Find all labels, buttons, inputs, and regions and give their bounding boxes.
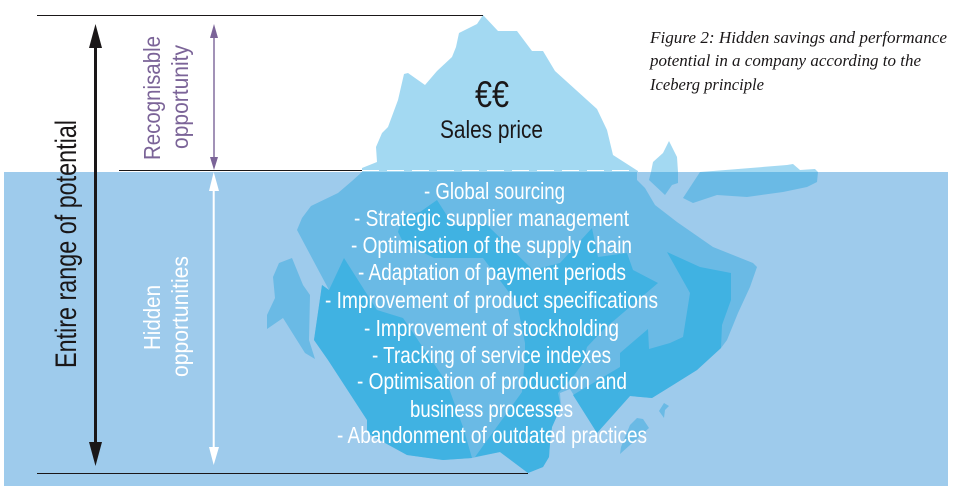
figure caption: potential in a company according to the xyxy=(649,51,921,70)
label: recognisable opportunity: opportunity xyxy=(167,45,193,149)
list: hidden savings: business processes xyxy=(410,396,573,422)
label: entire range of potential: Entire range of potential xyxy=(50,120,83,368)
list: hidden savings: - Optimisation of the supply chain xyxy=(351,232,632,258)
label: hidden opportunities: opportunities xyxy=(167,256,193,377)
list: hidden savings: - Global sourcing xyxy=(424,178,565,204)
label: recognisable opportunity: Recognisable xyxy=(139,36,165,160)
list: hidden savings xyxy=(325,178,658,448)
list: hidden savings: - Optimisation of production and xyxy=(357,368,627,394)
water panel xyxy=(4,172,948,486)
list: hidden savings: - Tracking of service indexes xyxy=(372,342,611,368)
heading: sales price xyxy=(440,74,543,144)
list: hidden savings: - Abandonment of outdated practices xyxy=(337,422,647,448)
label: hidden opportunities: Hidden xyxy=(139,285,165,350)
list: hidden savings: - Improvement of stockholding xyxy=(364,315,619,341)
arrow: entire range xyxy=(89,24,102,466)
iceberg above the water xyxy=(362,15,818,172)
figure caption: Iceberg principle xyxy=(649,75,764,94)
label: recognisable opportunity xyxy=(139,36,193,160)
level lines xyxy=(37,16,528,474)
iceberg below the water: outer layer xyxy=(267,172,818,473)
arrow: hidden opportunities xyxy=(209,172,219,465)
heading: sales price: €€ xyxy=(475,74,509,115)
iceberg below the water: dark core xyxy=(314,200,731,473)
waterline dashes xyxy=(362,170,636,172)
list: hidden savings: - Adaptation of payment periods xyxy=(358,259,626,285)
heading: sales price: Sales price xyxy=(440,116,543,144)
label: hidden opportunities xyxy=(139,256,193,377)
figure caption xyxy=(649,28,947,94)
figure caption: Figure 2: Hidden savings and performance xyxy=(649,28,947,47)
list: hidden savings: - Improvement of product specifications xyxy=(325,287,658,313)
list: hidden savings: - Strategic supplier management xyxy=(354,205,630,231)
arrow: recognisable opportunity xyxy=(210,24,218,170)
